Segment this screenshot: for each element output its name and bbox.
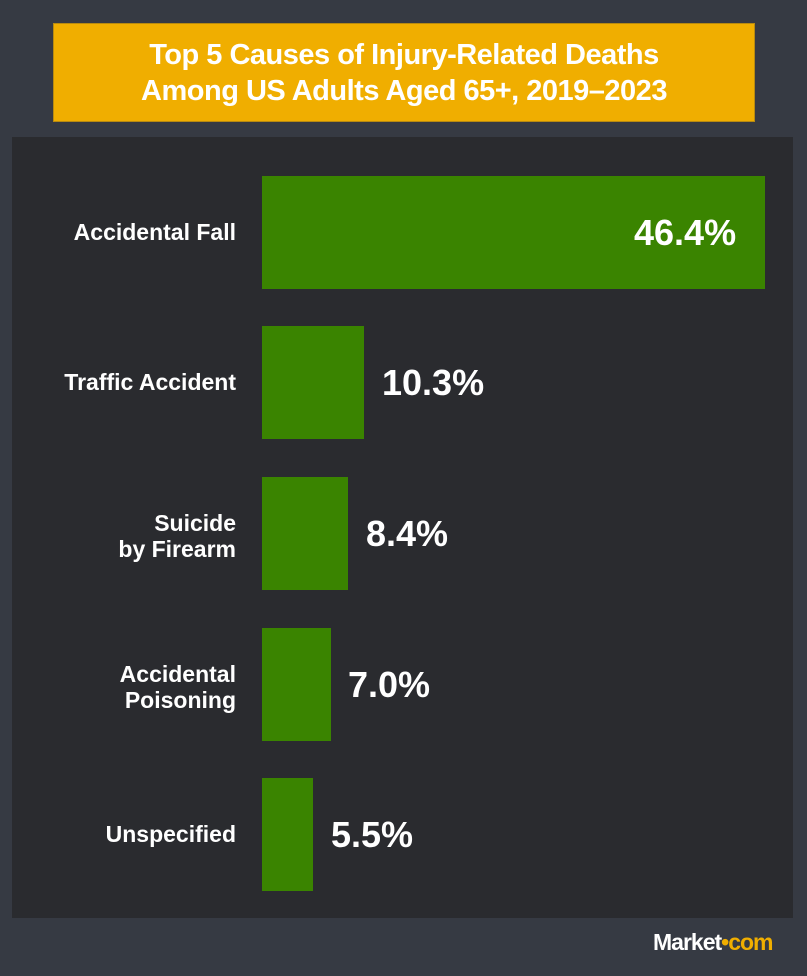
row: Unspecified: 5.5% — [331, 814, 413, 855]
row: Traffic Accident: 10.3% — [382, 362, 484, 403]
row: Traffic Accident: Traffic Accident — [64, 369, 236, 395]
panel: chart — [12, 137, 793, 918]
row: Accidental Fall: 46.4% — [634, 212, 736, 253]
row: Accidental Poisoning: Accidental — [120, 661, 236, 687]
row: Accidental Poisoning: 7.0% — [348, 664, 430, 705]
title — [53, 23, 755, 122]
row: Suicide by Firearm — [118, 477, 448, 590]
row: Suicide by Firearm: by Firearm — [118, 536, 236, 562]
title: Among US Adults Aged 65+, 2019–2023 — [141, 75, 667, 107]
row: Accidental Fall — [74, 176, 765, 289]
logo: Market•com — [653, 929, 772, 955]
row: Suicide by Firearm: 8.4% — [366, 513, 448, 554]
row: Accidental Poisoning — [120, 628, 430, 741]
row: Suicide by Firearm: Suicide — [154, 510, 236, 536]
row: Accidental Fall: Accidental Fall — [74, 219, 236, 245]
title: Top 5 Causes of Injury-Related Deaths — [149, 39, 659, 71]
row: Unspecified: Unspecified — [106, 821, 236, 847]
row: Traffic Accident — [64, 326, 484, 439]
row: Accidental Poisoning: Poisoning — [125, 687, 236, 713]
row: Unspecified — [106, 778, 413, 891]
